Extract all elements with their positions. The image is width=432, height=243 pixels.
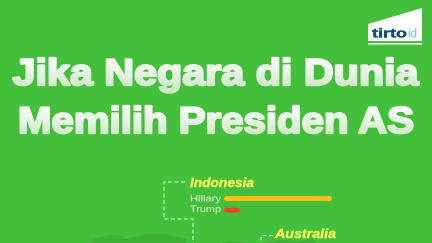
bar row: Trump: Trump bbox=[190, 204, 221, 215]
title bbox=[12, 52, 419, 141]
bar row: Hillary bbox=[190, 194, 332, 204]
label: Indonesia: Indonesia bbox=[190, 176, 254, 190]
world map fragments bbox=[90, 234, 316, 243]
bar row: Trump bbox=[190, 204, 240, 215]
dashed connector: Australia bbox=[261, 236, 273, 243]
logo: tirto.id bbox=[368, 8, 422, 45]
label: Australia: Australia bbox=[274, 227, 336, 241]
title: Jika Negara di Dunia bbox=[12, 52, 419, 93]
logo: tirto.id: tirto bbox=[372, 26, 407, 40]
title: Memilih Presiden AS bbox=[18, 100, 414, 141]
bar row: Hillary: Hillary bbox=[190, 194, 221, 204]
dashed connector: Indonesia bbox=[164, 182, 193, 243]
logo: tirto.id: id bbox=[408, 26, 417, 40]
